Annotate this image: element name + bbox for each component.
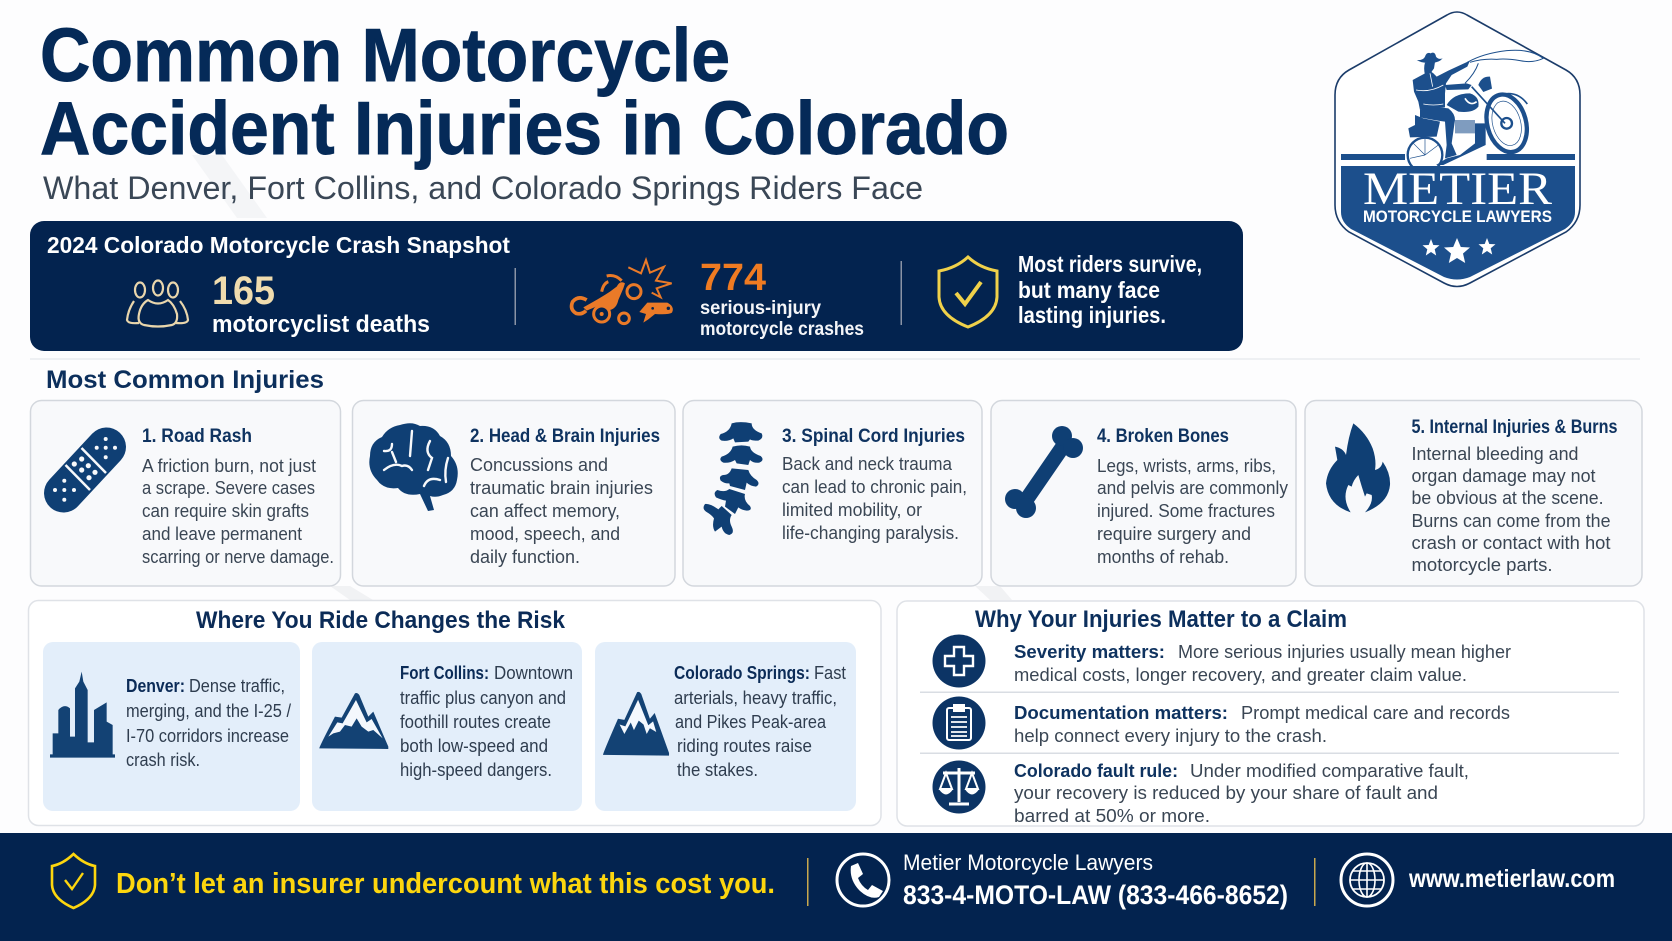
callout: most riders survive <box>1018 251 1202 328</box>
row: Colorado fault rule: Under modified comparative fault, <box>1190 760 1469 781</box>
stat: 165 deaths: 165 <box>212 269 275 313</box>
icon: spine <box>704 422 763 535</box>
text: bones description: require surgery and <box>1097 523 1251 544</box>
panel: broken bones <box>991 400 1296 586</box>
text: Denver risk: I-70 corridors increase <box>126 725 289 746</box>
text: Colorado Springs risk: and Pikes Peak-area <box>675 711 827 732</box>
icon: brain <box>369 423 458 511</box>
icon: shield check <box>939 257 997 327</box>
text: brain description: daily function. <box>470 546 580 567</box>
row: documentation: Prompt medical care and records <box>1241 702 1510 723</box>
panel: why your injuries matter to a claim <box>897 601 1644 826</box>
logo: Metier Motorcycle Lawyers badge <box>1335 12 1580 286</box>
title <box>40 13 1009 170</box>
stat: 774 crashes: serious-injury <box>700 297 821 319</box>
text: Fort Collins risk <box>400 662 573 780</box>
text: spinal description: limited mobility, or <box>782 499 922 520</box>
panel: spinal cord injuries <box>683 400 982 586</box>
stat: 165 deaths <box>212 269 430 338</box>
row: severity: Severity matters: <box>1014 641 1165 662</box>
text: burns description: Internal bleeding and <box>1412 443 1578 464</box>
text: spinal description: Back and neck trauma <box>782 453 953 474</box>
row: Colorado fault rule <box>932 760 1469 826</box>
text: Colorado Springs risk: riding routes raise <box>677 735 812 756</box>
text: burns description: motorcycle parts. <box>1412 554 1552 575</box>
text: road rash description: A friction burn, not just <box>142 455 316 476</box>
heading: why injuries matter: Why Your Injuries Matter to a Claim <box>975 606 1347 633</box>
call to action: Don’t let an insurer undercount what this cost you. <box>116 868 775 900</box>
contact: firm and phone number: 833-4-MOTO-LAW (833-466-8652) <box>903 880 1288 910</box>
title: Common Motorcycle <box>40 13 730 97</box>
card: Denver <box>43 642 300 811</box>
icon: rider on motorcycle <box>1405 50 1543 172</box>
text: Fort Collins risk: both low-speed and <box>400 735 548 756</box>
row: severity: More serious injuries usually mean higher <box>1178 641 1511 662</box>
heading: where you ride: Where You Ride Changes the Risk <box>196 607 566 634</box>
text: spinal description: can lead to chronic pain, <box>782 476 967 497</box>
panel: internal injuries and burns: 5. Internal Injuries & Burns <box>1412 416 1618 438</box>
icon: bandage <box>36 419 134 521</box>
card: Colorado Springs <box>595 642 856 811</box>
text: burns description: Burns can come from the <box>1412 510 1610 531</box>
callout: most riders survive: lasting injuries. <box>1018 302 1166 328</box>
text: brain description: mood, speech, and <box>470 523 620 544</box>
stat: 165 deaths: motorcyclist deaths <box>212 311 430 338</box>
text: Fort Collins risk: traffic plus canyon and <box>400 687 566 708</box>
text: Denver risk: crash risk. <box>126 749 200 770</box>
contact: firm and phone number: Metier Motorcycle Lawyers <box>903 850 1153 875</box>
text: burns description <box>1412 443 1610 575</box>
panel: internal injuries and burns <box>1305 400 1642 586</box>
icon: motorcycle crash <box>572 260 673 324</box>
icon: flame <box>1326 423 1390 512</box>
text: Denver risk: Denver: <box>126 675 185 696</box>
text: spinal description <box>782 453 967 543</box>
callout: most riders survive: but many face <box>1018 277 1160 303</box>
text: bones description <box>1097 455 1289 567</box>
icon: phone <box>837 854 889 906</box>
row: severity: medical costs, longer recovery, and greater claim value. <box>1014 664 1467 685</box>
text: spinal description: life-changing paralysis. <box>782 522 959 543</box>
text: Colorado Springs risk: the stakes. <box>677 759 758 780</box>
text: Denver risk: Dense traffic, <box>189 675 285 696</box>
icon: mountain <box>319 693 388 749</box>
icon: globe <box>1341 854 1393 906</box>
icon: group of people <box>127 280 188 326</box>
footer bar <box>0 833 1672 941</box>
card: Fort Collins <box>312 642 582 811</box>
text: bones description: Legs, wrists, arms, ribs, <box>1097 455 1276 476</box>
row: Colorado fault rule: Colorado fault rule: <box>1014 760 1178 781</box>
icon: footer shield <box>52 854 95 908</box>
icon: bone <box>1005 426 1083 518</box>
icon: Pikes Peak <box>603 692 669 756</box>
text: Denver risk <box>126 675 292 770</box>
text: brain description <box>470 454 653 567</box>
text: burns description: organ damage may not <box>1412 465 1596 486</box>
text: brain description: can affect memory, <box>470 500 620 521</box>
panel: head and brain injuries <box>352 400 675 586</box>
text: Fort Collins risk: high-speed dangers. <box>400 759 552 780</box>
text: Fort Collins risk: Downtown <box>494 662 573 683</box>
panel: road rash <box>30 400 340 586</box>
row: Colorado fault rule: your recovery is reduced by your share of fault and <box>1014 782 1438 803</box>
panel: road rash: 1. Road Rash <box>142 425 252 447</box>
panel: head and brain injuries: 2. Head & Brain Injuries <box>470 425 660 447</box>
text: burns description: crash or contact with hot <box>1412 532 1610 553</box>
icon: three stars <box>1422 238 1496 263</box>
stat: 774 crashes: 774 <box>700 257 766 299</box>
panel: 2024 crash snapshot <box>30 221 1243 351</box>
text: Denver risk: merging, and the I-25 / <box>126 700 292 721</box>
text: Fort Collins risk: Fort Collins: <box>400 662 489 683</box>
text: road rash description <box>142 455 334 567</box>
text: road rash description: can require skin grafts <box>142 500 309 521</box>
stat: 774 crashes <box>700 257 864 340</box>
row: documentation: help connect every injury to the crash. <box>1014 725 1327 746</box>
text: road rash description: a scrape. Severe cases <box>142 477 315 498</box>
title: Accident Injuries in Colorado <box>40 86 1009 170</box>
text: Colorado Springs risk <box>674 662 846 780</box>
text: Colorado Springs risk: Colorado Springs: <box>674 662 810 683</box>
row: severity <box>932 634 1511 688</box>
website: www.metierlaw.com <box>1408 865 1615 893</box>
logo: Metier Motorcycle Lawyers badge: METIER <box>1363 163 1553 215</box>
text: road rash description: and leave permanent <box>142 523 302 544</box>
panel: spinal cord injuries: 3. Spinal Cord Injuries <box>782 425 965 447</box>
row: Colorado fault rule: barred at 50% or more. <box>1014 805 1210 826</box>
subtitle: What Denver, Fort Collins, and Colorado Springs Riders Face <box>43 170 923 206</box>
panel: broken bones: 4. Broken Bones <box>1097 425 1229 447</box>
heading: snapshot: 2024 Colorado Motorcycle Crash Snapshot <box>47 232 510 258</box>
logo: Metier Motorcycle Lawyers badge: MOTORCYCLE LAWYERS <box>1363 208 1552 226</box>
heading: most common injuries: Most Common Injuries <box>46 366 324 394</box>
text: Fort Collins risk: foothill routes create <box>400 711 551 732</box>
text: bones description: injured. Some fractures <box>1097 500 1275 521</box>
text: brain description: traumatic brain injuries <box>470 477 653 498</box>
text: bones description: months of rehab. <box>1097 546 1229 567</box>
stat: 774 crashes: motorcycle crashes <box>700 318 864 340</box>
text: road rash description: scarring or nerve damage. <box>142 546 334 567</box>
icon: city skyline <box>50 672 115 758</box>
row: documentation <box>932 696 1510 750</box>
row: documentation: Documentation matters: <box>1014 702 1228 723</box>
text: brain description: Concussions and <box>470 454 608 475</box>
text: Colorado Springs risk: Fast <box>814 662 846 683</box>
text: bones description: and pelvis are commonly <box>1097 477 1289 498</box>
text: Colorado Springs risk: arterials, heavy traffic, <box>674 687 837 708</box>
callout: most riders survive: Most riders survive, <box>1018 251 1202 277</box>
panel: where you ride changes the risk <box>28 600 881 826</box>
contact: firm and phone number <box>903 850 1288 910</box>
text: burns description: be obvious at the scene. <box>1412 487 1604 508</box>
